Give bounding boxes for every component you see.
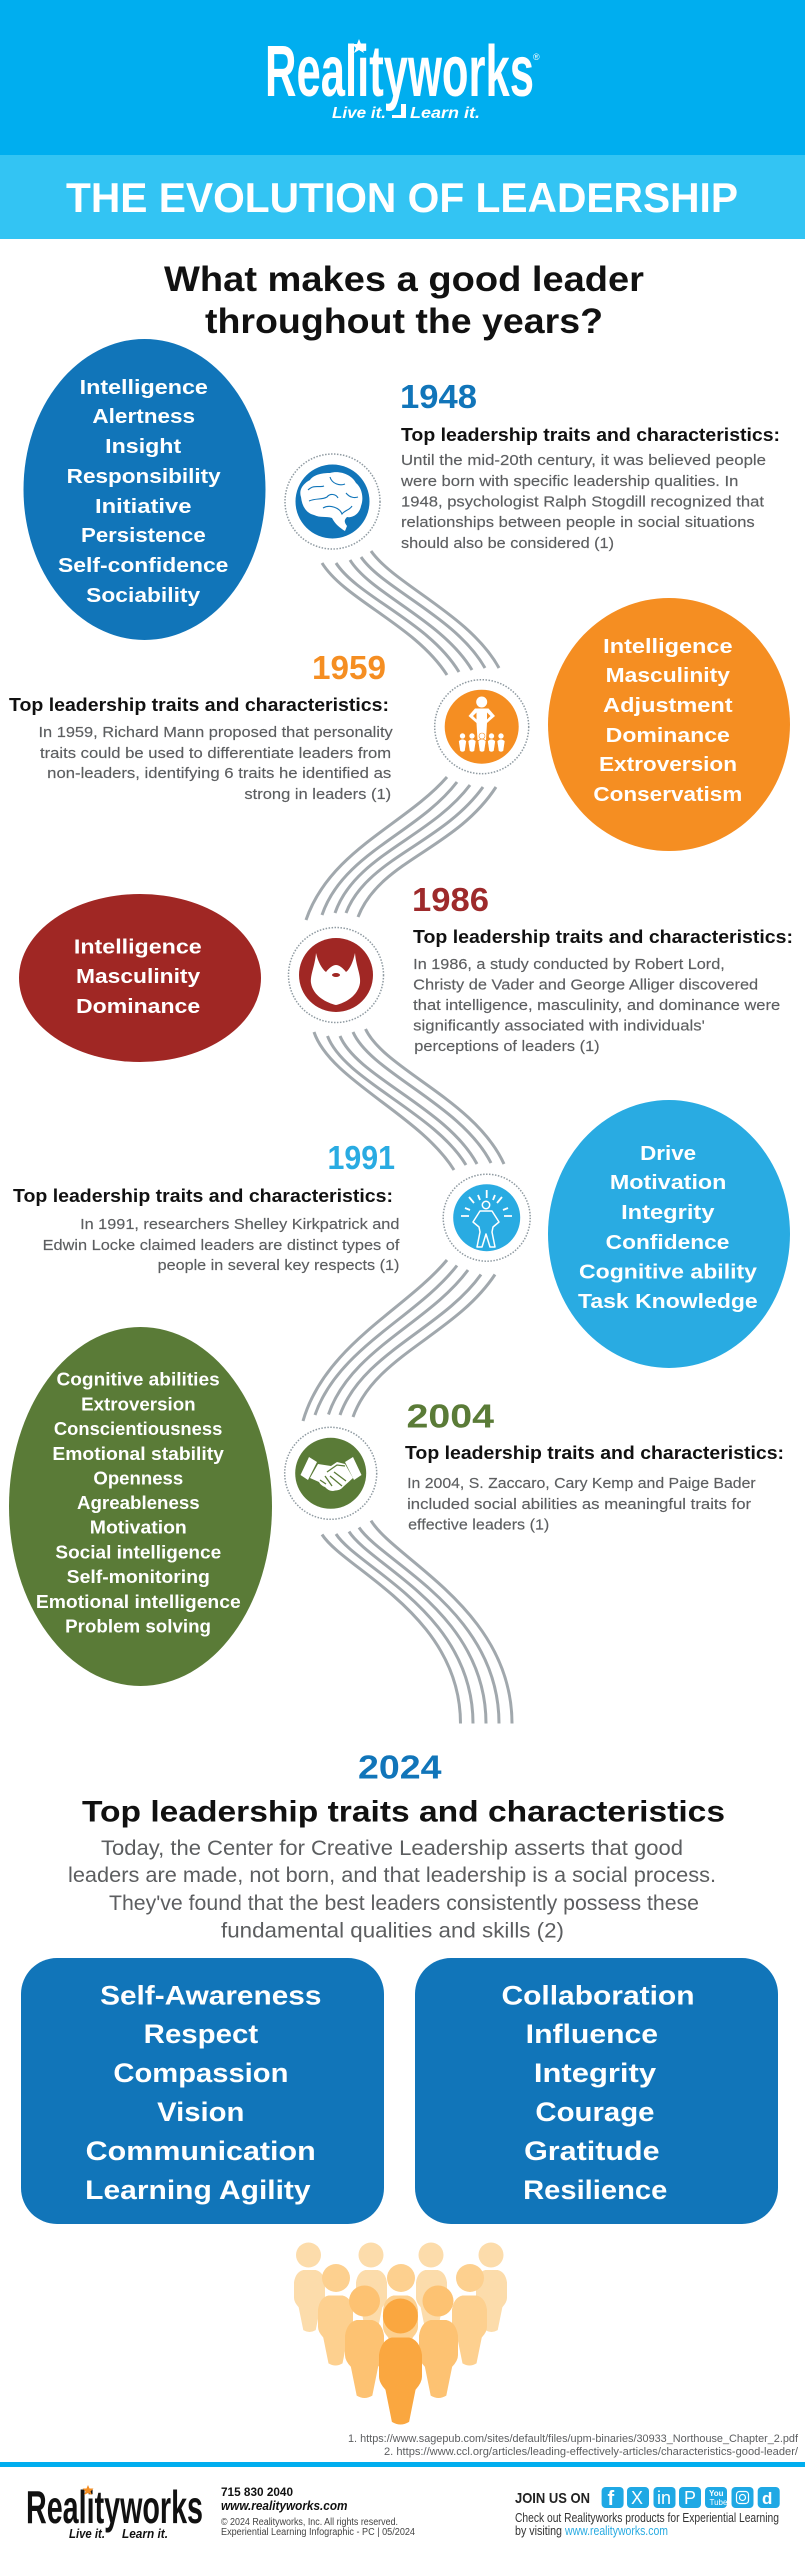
description 1986: Christy de Vader and George Alliger discovered	[413, 976, 758, 994]
panel: 1959 traits oval: Dominance	[606, 725, 730, 747]
description 1948: were born with specific leadership qualities. In	[400, 473, 738, 490]
panel: 1986 text	[412, 881, 793, 1055]
panel: 1959 traits oval: Extroversion	[599, 754, 737, 776]
references: 2. https://www.ccl.org/articles/leading-effectively-articles/characteristics-good-leader/	[384, 2446, 799, 2458]
panel: 1959 text	[9, 649, 393, 803]
panel: skills box left: Respect	[144, 2019, 258, 2049]
panel: 1986 traits oval: Intelligence	[74, 936, 202, 958]
panel: 1948 traits oval: Responsibility	[67, 466, 222, 488]
footer contact: Experiential Learning Infographic - PC | 05/2024	[221, 2527, 415, 2538]
description 1959: In 1959, Richard Mann proposed that personality	[38, 724, 393, 741]
header band with logo	[0, 0, 805, 155]
main heading: throughout the years?	[205, 302, 603, 341]
description 2004: included social abilities as meaningful traits for	[407, 1496, 751, 1513]
description 1986: significantly associated with individuals'	[413, 1018, 705, 1035]
panel: 1959 traits oval: Intelligence	[603, 636, 733, 658]
footer social: by visiting	[515, 2523, 562, 2538]
panel: 1991 traits oval: Confidence	[606, 1232, 729, 1254]
footer contact: © 2024 Realityworks, Inc. All rights reserved.	[221, 2517, 398, 2528]
description 1948	[400, 452, 766, 552]
description 2024: fundamental qualities and skills (2)	[221, 1920, 564, 1943]
description 1959: strong in leaders (1)	[244, 786, 391, 803]
panel: 1986 traits oval: Dominance	[76, 996, 200, 1018]
panel: skills box right	[415, 1958, 778, 2224]
description 1959: traits could be used to differentiate leaders from	[40, 745, 391, 762]
panel: skills box right: Gratitude	[524, 2136, 660, 2166]
panel: 2004 traits oval: Agreableness	[77, 1493, 200, 1513]
panel: 2004 traits oval: Problem solving	[65, 1616, 211, 1636]
panel: 2004 traits oval: Extroversion	[81, 1394, 196, 1414]
panel: 2004 text	[405, 1398, 784, 1534]
panel: skills box right: Courage	[535, 2097, 654, 2127]
panel: skills box right: Collaboration	[502, 1980, 694, 2010]
icon: group of people	[294, 2242, 507, 2424]
panel: 1959 traits oval: Adjustment	[603, 695, 733, 717]
panel: 2004 traits oval: Openness	[93, 1469, 183, 1489]
social icons: P	[684, 2488, 696, 2508]
heading 2024: Top leadership traits and characteristics	[82, 1795, 725, 1828]
description 2024: They've found that the best leaders consistently possess these	[109, 1892, 699, 1915]
panel: 2004 traits oval: Emotional intelligence	[36, 1592, 241, 1612]
road: 1991 to 2004	[303, 1260, 495, 1421]
description 2024: leaders are made, not born, and that leadership is a social process.	[68, 1864, 716, 1887]
panel: skills box left: Communication	[86, 2136, 316, 2166]
social icons: X	[631, 2488, 643, 2508]
description 1986: In 1986, a study conducted by Robert Lord,	[413, 956, 725, 973]
panel: 1991 traits oval: Drive	[640, 1143, 696, 1165]
description 1948: should also be considered (1)	[401, 535, 614, 552]
panel: 2004 traits oval: Emotional stability	[52, 1444, 224, 1464]
description 1986: that intelligence, masculinity, and dominance were	[413, 997, 780, 1014]
year 2024: 2024	[358, 1749, 442, 1786]
logo star	[352, 39, 366, 53]
panel: skills box right: Influence	[526, 2019, 658, 2049]
panel: 1991 traits oval: Cognitive ability	[579, 1262, 758, 1284]
panel: skills box left: Vision	[157, 2097, 244, 2127]
description 1986: perceptions of leaders (1)	[414, 1038, 600, 1055]
description 1986	[413, 956, 780, 1055]
year 1991: 1991	[328, 1139, 395, 1176]
road: 1986 to 1991	[314, 1029, 504, 1170]
panel: 1948 traits oval: Insight	[105, 436, 182, 458]
panel: 1948 traits oval: Persistence	[81, 525, 206, 547]
panel: 2004 traits oval: Conscientiousness	[54, 1419, 222, 1439]
logo tagline	[332, 104, 480, 122]
road: 2004 to 2024	[322, 1521, 512, 1724]
description 1991: Edwin Locke claimed leaders are distinct types of	[43, 1237, 400, 1254]
footer social: JOIN US ON	[515, 2490, 590, 2507]
panel: 2004 traits oval: Self-monitoring	[67, 1567, 210, 1587]
footer social	[515, 2487, 780, 2538]
description 1991	[43, 1216, 400, 1274]
description 1959	[38, 724, 393, 803]
panel: 1948 traits oval	[24, 339, 266, 640]
social icons: in	[657, 2488, 671, 2508]
logo tagline: Live it.	[332, 105, 386, 122]
references	[348, 2433, 799, 2458]
footer contact	[221, 2485, 415, 2538]
panel: 1948 traits oval: Self-confidence	[58, 555, 228, 577]
panel: 2004 traits oval: Cognitive abilities	[56, 1370, 220, 1390]
social icons: d	[762, 2489, 772, 2508]
panel: 2004 traits oval: Social intelligence	[55, 1543, 221, 1563]
panel: 2004 traits oval: Motivation	[90, 1518, 187, 1538]
road: 1959 to 1986	[306, 777, 496, 920]
main heading	[164, 260, 644, 341]
description 1991: people in several key respects (1)	[158, 1257, 399, 1274]
logo registered mark: ®	[533, 52, 540, 62]
icon: handshake	[285, 1427, 377, 1519]
main heading: What makes a good leader	[164, 260, 644, 299]
title: THE EVOLUTION OF LEADERSHIP	[66, 174, 738, 221]
year 2004: 2004	[406, 1398, 495, 1434]
social icons: f	[608, 2488, 614, 2510]
footer contact: www.realityworks.com	[221, 2498, 348, 2513]
footer logo: Live it.	[69, 2527, 105, 2541]
logo wordmark: Realityworks	[265, 32, 534, 112]
year 1959: 1959	[312, 649, 386, 686]
description 1991: In 1991, researchers Shelley Kirkpatrick and	[80, 1216, 399, 1233]
panel: 1959 traits oval: Conservatism	[593, 784, 742, 806]
description 1959: non-leaders, identifying 6 traits he identified as	[47, 765, 391, 782]
panel: 1991 traits oval: Motivation	[610, 1172, 726, 1194]
footer rule	[0, 2462, 805, 2467]
panel: 1986 traits oval: Masculinity	[76, 966, 201, 988]
panel: skills box left: Compassion	[113, 2058, 288, 2088]
icon: person with rays	[443, 1174, 530, 1261]
panel: 1948 traits oval: Sociability	[86, 585, 201, 607]
heading 1991: Top leadership traits and characteristics:	[13, 1185, 393, 1206]
panel: 2024 intro	[68, 1749, 725, 1943]
title band	[0, 155, 805, 239]
references: 1. https://www.sagepub.com/sites/default/files/upm-binaries/30933_Northouse_Chapter_2.pdf	[348, 2433, 799, 2445]
description 2024: Today, the Center for Creative Leadership asserts that good	[101, 1837, 683, 1860]
footer logo: Learn it.	[122, 2527, 168, 2541]
heading 1959: Top leadership traits and characteristics:	[9, 694, 389, 715]
panel: 1959 traits oval: Masculinity	[606, 665, 731, 687]
icon: brain	[285, 454, 380, 549]
year 1986: 1986	[412, 881, 489, 918]
social icons	[602, 2487, 780, 2510]
panel: 1991 traits oval: Integrity	[621, 1202, 716, 1224]
social icons: Tube	[710, 2498, 728, 2507]
icon: beard	[288, 928, 384, 1022]
panel: 1991 text	[13, 1139, 400, 1274]
panel: 1948 traits oval: Alertness	[92, 406, 195, 428]
description 1948: relationships between people in social situations	[401, 514, 755, 531]
panel: skills box left: Learning Agility	[85, 2175, 311, 2205]
logo tagline: Learn it.	[410, 105, 480, 122]
social icons: You	[709, 2489, 724, 2498]
panel: 1986 traits oval	[19, 894, 261, 1062]
panel: skills box left: Self-Awareness	[100, 1980, 321, 2010]
panel: 1959 traits oval	[548, 598, 790, 851]
heading 1986: Top leadership traits and characteristics:	[413, 926, 793, 947]
panel: 1948 text	[400, 378, 780, 552]
panel: skills box left	[21, 1958, 384, 2224]
panel: 1991 traits oval: Task Knowledge	[578, 1291, 758, 1313]
description 2004	[407, 1475, 756, 1534]
heading 1948: Top leadership traits and characteristics:	[401, 424, 780, 445]
panel: 2004 traits oval	[9, 1327, 272, 1686]
description 1948: 1948, psychologist Ralph Stogdill recognized that	[401, 494, 765, 510]
description 1948: Until the mid-20th century, it was believed people	[401, 452, 766, 469]
heading 2004: Top leadership traits and characteristics:	[405, 1442, 784, 1463]
panel: skills box right: Integrity	[534, 2058, 656, 2088]
panel: 1948 traits oval: Initiative	[95, 496, 192, 518]
description 2024	[68, 1837, 716, 1943]
footer social: www.realityworks.com	[564, 2523, 668, 2538]
footer logo	[26, 2481, 203, 2541]
icon: leader above group	[435, 680, 529, 774]
year 1948: 1948	[400, 378, 477, 415]
panel: skills box right: Resilience	[523, 2175, 667, 2205]
description 2004: In 2004, S. Zaccaro, Cary Kemp and Paige Bader	[407, 1475, 756, 1492]
road: 1948 to 1959	[322, 551, 499, 675]
panel: 1948 traits oval: Intelligence	[80, 377, 208, 399]
footer logo: Realityworks	[26, 2481, 203, 2533]
description 2004: effective leaders (1)	[408, 1517, 549, 1534]
panel: 1991 traits oval	[548, 1100, 790, 1368]
footer contact: 715 830 2040	[221, 2485, 293, 2499]
